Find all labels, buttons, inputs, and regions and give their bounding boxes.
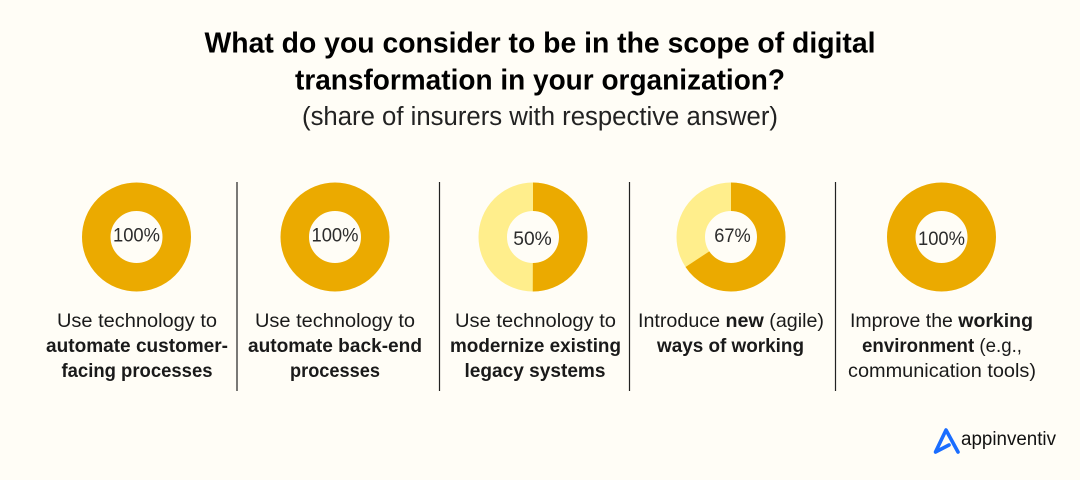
caption: back-end: automate back-end	[248, 335, 422, 357]
caption: agile: Introduce new (agile)	[638, 310, 824, 332]
value: 100%: 100%	[918, 229, 965, 250]
caption: back-end: Use technology to	[255, 310, 415, 332]
panel: agile ways of working	[638, 197, 824, 357]
caption: customer-facing: facing processes	[62, 360, 213, 382]
caption: agile: ways of working	[656, 335, 804, 357]
value: 100%: 100%	[113, 226, 160, 246]
panel: back-end automation	[248, 197, 422, 382]
caption: legacy: legacy systems	[464, 360, 606, 382]
caption: customer-facing	[46, 310, 228, 382]
value: 100%: 100%	[312, 226, 359, 246]
subtitle: (share of insurers with respective answer)	[302, 103, 778, 131]
caption: customer-facing: Use technology to	[57, 310, 217, 332]
donut chart: 100%	[96, 197, 177, 277]
caption: agile	[638, 310, 824, 357]
caption: working environment: communication tools)	[848, 360, 1036, 382]
icon: blue arrow triangle	[936, 430, 958, 452]
caption: customer-facing: automate customer-	[46, 335, 228, 357]
donut chart: 100%	[901, 197, 982, 277]
caption: working environment: environment (e.g.,	[862, 335, 1022, 357]
caption: legacy	[450, 310, 621, 382]
caption: legacy: Use technology to	[455, 310, 616, 332]
title	[204, 28, 876, 96]
caption: working environment: Improve the working	[850, 310, 1033, 332]
caption: working environment	[848, 310, 1036, 382]
caption: back-end	[248, 310, 422, 382]
wordmark: appinventiv	[961, 429, 1056, 450]
value: 50%: 50%	[513, 229, 552, 250]
title: transformation in your organization?	[295, 64, 785, 96]
caption: legacy: modernize existing	[450, 335, 621, 357]
panel: legacy modernization	[450, 197, 621, 382]
caption: back-end: processes	[290, 360, 380, 382]
title: What do you consider to be in the scope of digital	[204, 28, 876, 60]
donut chart: 67%	[691, 197, 771, 277]
donut chart: 50%	[493, 197, 573, 277]
panel: customer-facing automation	[46, 197, 228, 382]
logo: appinventiv	[936, 429, 1056, 452]
value: 67%: 67%	[714, 226, 751, 247]
donut chart: 100%	[295, 197, 375, 277]
panel: working environment	[848, 197, 1036, 382]
